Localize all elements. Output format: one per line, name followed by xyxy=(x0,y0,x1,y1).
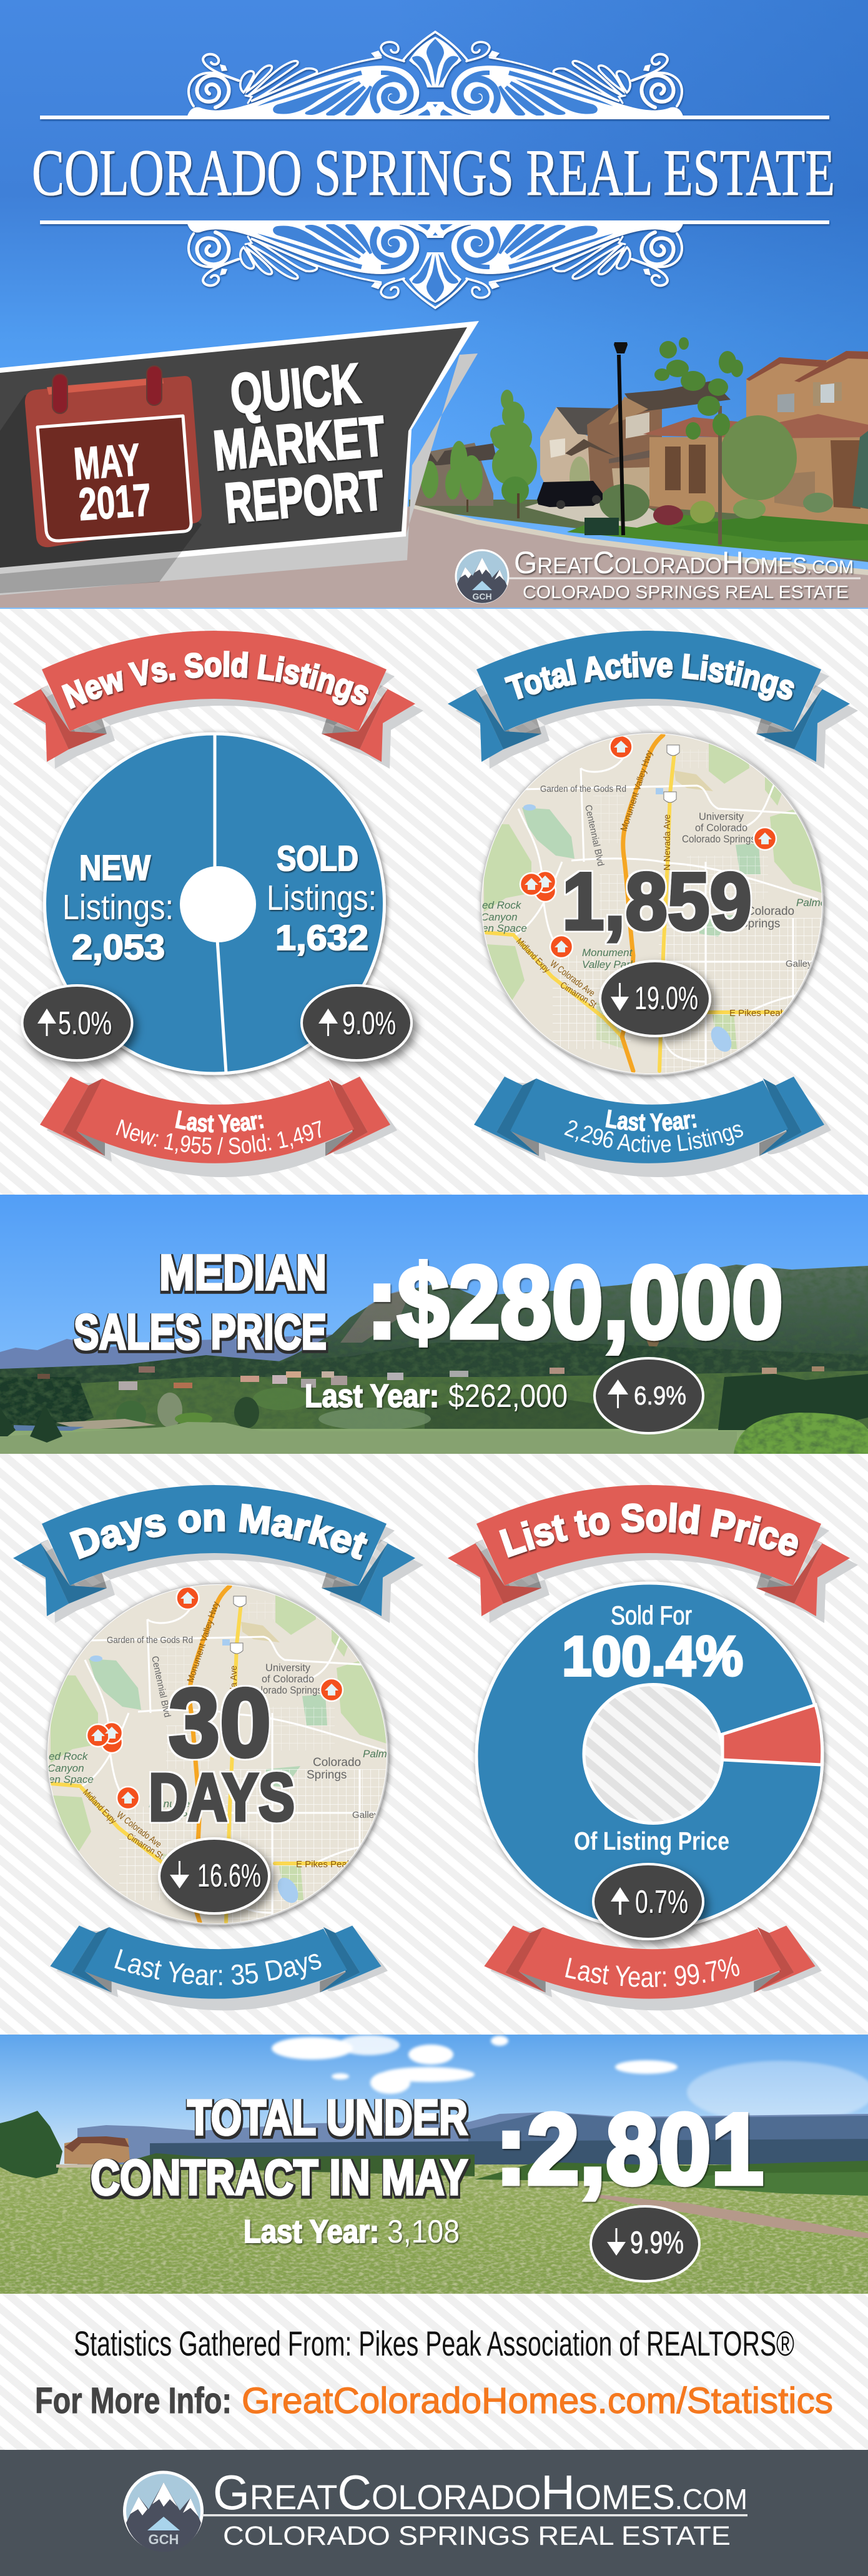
donut labels: Sold For xyxy=(611,1601,692,1630)
banner headline: MARKET xyxy=(211,405,388,483)
logo tagline: COLORADO SPRINGS REAL ESTATE xyxy=(223,2521,731,2551)
photo: meadow and range xyxy=(0,2035,868,2294)
ribbon: last year active listings xyxy=(474,1077,831,1177)
logo: header: GCH xyxy=(472,591,492,601)
panel: total active listings xyxy=(448,631,858,1177)
sold listings figures: Listings: xyxy=(267,878,377,918)
foliage highlights xyxy=(56,1388,431,1430)
ribbon: days on market heading xyxy=(13,1485,423,1623)
map: days on market xyxy=(41,1579,397,1935)
banner back fold xyxy=(0,353,478,595)
ornament: bottom flourish and rules xyxy=(40,220,829,308)
sky xyxy=(0,0,868,609)
ribbon: last year days xyxy=(50,1926,388,2011)
forest xyxy=(0,1343,868,1434)
heading: median sales price: SALES PRICE xyxy=(74,1304,327,1360)
more info link: GreatColoradoHomes.com/Statistics xyxy=(242,2381,833,2421)
ribbon: new vs sold heading: New Vs. Sold Listings xyxy=(61,651,370,711)
footer xyxy=(0,2450,868,2576)
logo wordmark: GREATCOLORADOHOMES.COM xyxy=(213,2465,747,2520)
ribbon: last year days: Last Year: 35 Days xyxy=(114,1949,321,1985)
new listings figures: NEW xyxy=(79,848,150,888)
ribbon: last year new and sold xyxy=(40,1077,397,1177)
last year under contract: 3,108 xyxy=(387,2214,460,2250)
gravel road xyxy=(590,2195,868,2237)
shrubs and SUV xyxy=(537,481,833,535)
photo: mountain backdrop xyxy=(0,1195,868,1454)
heading text: List to Sold Price xyxy=(499,1503,800,1560)
last year median price xyxy=(305,1378,568,1414)
tan stucco house xyxy=(643,351,868,525)
heading: total under contract xyxy=(91,2090,468,2205)
banner headline xyxy=(211,352,388,535)
last year median price: $262,000 xyxy=(448,1378,568,1414)
ribbon: last year list to sold: Last Year: 99.7% xyxy=(565,1957,739,1987)
heading: total under contract: CONTRACT IN MAY xyxy=(91,2149,468,2205)
map: days on market: DAYS xyxy=(149,1759,295,1835)
new listings figures xyxy=(62,848,174,967)
heading text: Days on Market xyxy=(69,1504,370,1562)
ribbon: list to sold price heading xyxy=(448,1485,858,1623)
trees xyxy=(421,337,868,545)
distant houses xyxy=(413,443,496,506)
calendar icon xyxy=(25,366,202,547)
last year median price: Last Year: xyxy=(305,1378,439,1414)
logo: header xyxy=(456,545,861,603)
ribbon: last year active listings: 2,296 Active Listings xyxy=(565,1120,743,1153)
value: 30 xyxy=(169,1669,271,1777)
calendar month: MAY xyxy=(72,435,142,490)
badge: days down 16.6% xyxy=(159,1838,269,1913)
road xyxy=(0,505,868,608)
ornament: top flourish and rules xyxy=(40,32,829,119)
banner headline: REPORT xyxy=(222,459,387,535)
map: colorado springs listings xyxy=(475,728,831,1083)
farmhouse xyxy=(64,2138,130,2164)
banner: quick market report xyxy=(0,321,479,595)
badge: list to sold up 0.7%: 0.7% xyxy=(635,1884,688,1920)
brown house xyxy=(565,381,731,509)
donut chart: sold vs listing price: Of Listing Price xyxy=(574,1827,729,1855)
logo: header: COLORADO SPRINGS REAL ESTATE xyxy=(523,583,849,603)
logo: header: GREATCOLORADOHOMES.COM xyxy=(514,545,854,580)
panel: days on market xyxy=(13,1485,423,2011)
logo emblem xyxy=(125,2472,202,2552)
ribbon: total active listings heading xyxy=(448,631,858,769)
logo emblem: GCH xyxy=(149,2532,179,2547)
sold listings figures: SOLD xyxy=(277,839,358,879)
badge: new up 5.0%: 5.0% xyxy=(58,1005,112,1042)
hillside houses xyxy=(37,1366,824,1390)
badge: median up 6.9% xyxy=(594,1358,703,1433)
more info link: For More Info: xyxy=(35,2381,232,2421)
value: median price: :$280,000 xyxy=(367,1245,783,1360)
badge: active listings down 19.0%: 19.0% xyxy=(634,980,698,1017)
badge: sold up 9.0%: 9.0% xyxy=(342,1005,396,1042)
value: under contract: :2,801 xyxy=(495,2093,764,2206)
badge: new up 5.0% xyxy=(22,985,132,1060)
ribbon: last year new and sold: New: 1,955 / Sold: 1,497 xyxy=(116,1119,321,1155)
badge: active listings down 19.0% xyxy=(600,961,710,1036)
badge: under contract down 9.9% xyxy=(591,2206,699,2281)
badge: under contract down 9.9%: 9.9% xyxy=(630,2225,684,2260)
heading: median sales price xyxy=(74,1245,327,1360)
heading: median sales price: MEDIAN xyxy=(159,1245,327,1300)
new listings figures: Listings: xyxy=(62,887,174,927)
sold listings figures: 1,632 xyxy=(275,918,368,958)
ribbon: last year list to sold xyxy=(484,1925,822,2010)
panel: median sales price xyxy=(0,1195,868,1454)
panel: total under contract xyxy=(0,2035,868,2294)
ribbon heading text: Total Active Listings xyxy=(504,651,796,703)
donut chart: sold vs listing price xyxy=(476,1583,822,1929)
badge: list to sold up 0.7% xyxy=(593,1864,703,1939)
calendar year: 2017 xyxy=(77,475,153,530)
pine tree xyxy=(0,2111,62,2178)
driveway xyxy=(56,2164,94,2168)
long shadow xyxy=(0,395,202,593)
pie chart: new vs sold xyxy=(45,734,385,1073)
header photo banner xyxy=(0,0,868,609)
badge: sold up 9.0% xyxy=(302,985,412,1060)
photo: neighbourhood street xyxy=(409,337,868,562)
donut chart: sold vs listing price: 100.4% xyxy=(562,1626,743,1688)
last year under contract: Last Year: xyxy=(244,2214,379,2250)
street lamp xyxy=(614,342,628,535)
value: 1,859 xyxy=(562,856,752,947)
sold listings figures xyxy=(267,839,377,958)
panel: list to sold price xyxy=(448,1485,858,2011)
banner headline: QUICK xyxy=(228,352,363,426)
ribbon: new vs sold heading xyxy=(13,631,423,769)
new listings figures: 2,053 xyxy=(72,927,165,967)
badge: days down 16.6%: 16.6% xyxy=(197,1858,261,1894)
ribbon: last year new and sold: Last Year: xyxy=(175,1110,264,1133)
beige house xyxy=(540,407,615,493)
heading: total under contract: TOTAL UNDER xyxy=(187,2090,468,2145)
badge: median up 6.9%: 6.9% xyxy=(634,1381,686,1410)
panel: new vs sold listings xyxy=(13,631,423,1177)
ribbon: last year active listings: Last Year: xyxy=(606,1109,697,1132)
